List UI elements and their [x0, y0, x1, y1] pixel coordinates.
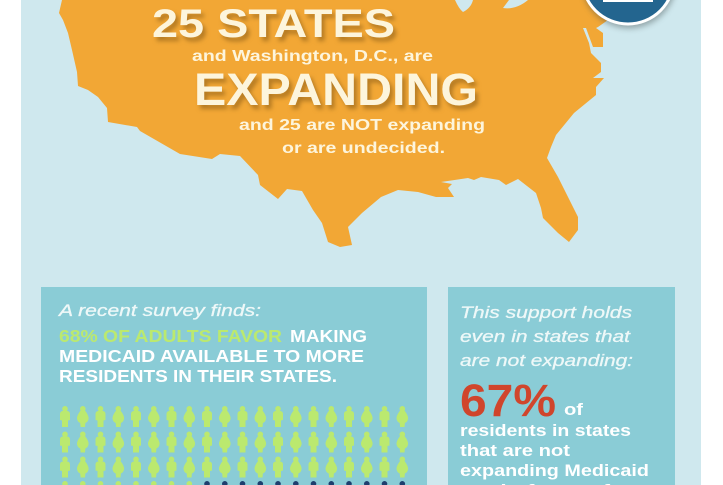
statistic: 67%: 67% [460, 375, 556, 426]
panel: non-expanding states [448, 287, 675, 485]
survey finding: MAKING [290, 326, 367, 346]
support intro: are not expanding: [460, 351, 633, 370]
survey finding: RESIDENTS IN THEIR STATES. [59, 366, 337, 386]
headline: map text: or are undecided. [282, 140, 445, 157]
panel: survey [41, 287, 427, 485]
lakes [455, 0, 528, 12]
headline: map text: EXPANDING [194, 64, 478, 115]
statistic description [460, 400, 649, 485]
statistic description: expanding Medicaid [460, 461, 649, 480]
survey intro: A recent survey finds: [58, 301, 261, 320]
support intro: This support holds [460, 303, 633, 322]
survey finding [59, 326, 367, 386]
support intro [460, 303, 633, 370]
statistic description: of [564, 400, 583, 419]
headline: map text [152, 2, 485, 157]
survey finding: MEDICAID AVAILABLE TO MORE [59, 346, 364, 366]
survey finding: 68% OF ADULTS FAVOR [59, 326, 282, 346]
headline: map text: and Washington, D.C., are [192, 48, 433, 65]
headline: map text: 25 STATES [152, 2, 395, 46]
support intro: even in states that [460, 327, 632, 346]
pictogram: 68 of 100 adults [60, 406, 408, 485]
headline: map text: and 25 are NOT expanding [239, 117, 485, 134]
map of the United States [59, 0, 640, 247]
statistic description: that are not [460, 441, 570, 460]
statistic description: residents in states [460, 421, 631, 440]
badge icon [582, 0, 674, 24]
